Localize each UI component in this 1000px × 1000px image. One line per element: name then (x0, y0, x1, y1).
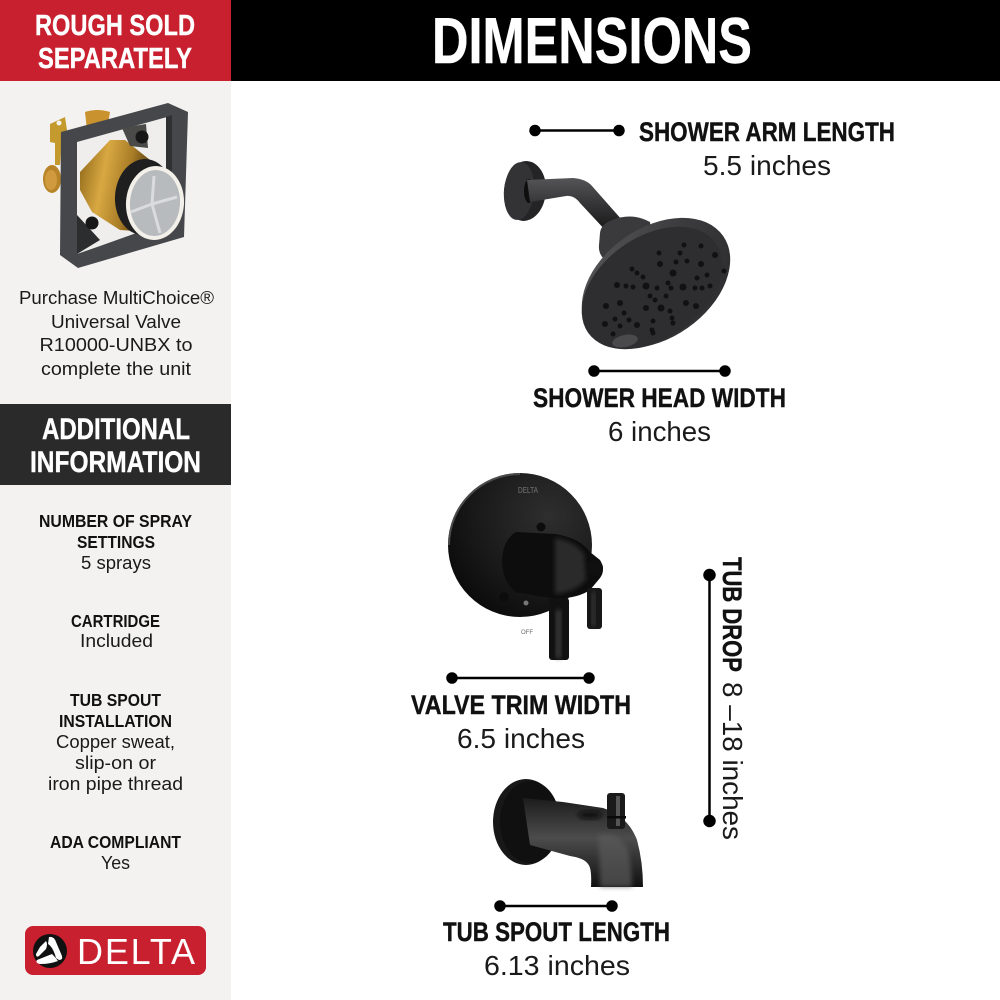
icon: rough-in valve product (43, 103, 188, 268)
label: shower head width (533, 383, 786, 447)
spec: cartridge: Included (80, 631, 153, 651)
spec: cartridge: CARTRIDGE (71, 611, 160, 631)
banner: additional information: INFORMATION (30, 446, 201, 479)
label: valve trim width: 6.5 inches (457, 723, 585, 754)
spec: number of spray settings: SETTINGS (77, 532, 155, 552)
spec: tub spout installation: INSTALLATION (59, 711, 172, 731)
spec: cartridge (71, 611, 160, 651)
spec: tub spout installation: TUB SPOUT (70, 690, 161, 710)
banner: additional information (0, 404, 231, 485)
label: tub spout length: TUB SPOUT LENGTH (443, 917, 670, 947)
label: tub spout length: 6.13 inches (484, 950, 630, 981)
dimension line: tub spout (496, 902, 616, 910)
spec: ada compliant: Yes (101, 853, 130, 873)
label: valve trim width (411, 690, 631, 754)
label: shower arm length: 5.5 inches (703, 150, 831, 181)
spec: ada compliant (50, 832, 181, 873)
spec: number of spray settings (39, 511, 192, 573)
panel: sidebar background (0, 0, 231, 1000)
spec: number of spray settings: 5 sprays (81, 553, 151, 573)
illustration: tub spout (493, 779, 643, 887)
spec: ada compliant: ADA COMPLIANT (50, 832, 181, 852)
logo: delta (25, 926, 206, 975)
spec: tub spout installation: iron pipe thread (48, 774, 183, 794)
text block: valve purchase note: complete the unit (41, 359, 191, 379)
illustration: valve trim: OFF (521, 630, 533, 636)
label: tub drop: TUB DROP (717, 557, 747, 672)
spec: tub spout installation: slip-on or (75, 753, 156, 773)
dimension line: valve trim (448, 674, 594, 682)
illustration: valve trim (448, 473, 603, 660)
spec: number of spray settings: NUMBER OF SPRAY (39, 511, 192, 531)
label: valve trim width: VALVE TRIM WIDTH (411, 690, 631, 720)
illustration: valve trim: DELTA (518, 486, 539, 495)
label: shower arm length: SHOWER ARM LENGTH (639, 117, 895, 147)
label: shower head width: 6 inches (608, 416, 711, 447)
title banner: dimensions: DIMENSIONS (432, 4, 752, 77)
dimension line: shower head (590, 366, 730, 376)
logo: delta: DELTA (77, 931, 195, 972)
text block: valve purchase note: Purchase MultiChoice® (19, 288, 214, 308)
title banner: dimensions (231, 0, 1000, 81)
label: tub spout length (443, 917, 670, 981)
text block: valve purchase note (19, 288, 214, 379)
illustration: shower head (501, 159, 755, 375)
banner: rough sold separately (0, 0, 231, 81)
spec: tub spout installation (48, 690, 183, 794)
label: tub drop: 8 –18 inches (717, 682, 748, 840)
label: shower head width: SHOWER HEAD WIDTH (533, 383, 786, 413)
banner: additional information: ADDITIONAL (42, 413, 190, 446)
banner: rough sold separately: ROUGH SOLD (35, 10, 195, 42)
label: shower arm length (639, 117, 895, 181)
text block: valve purchase note: R10000-UNBX to (40, 335, 192, 355)
text block: valve purchase note: Universal Valve (51, 312, 181, 332)
banner: rough sold separately: SEPARATELY (38, 43, 192, 75)
spec: tub spout installation: Copper sweat, (56, 732, 175, 752)
label: tub drop (717, 557, 748, 840)
dimension line: tub drop (704, 570, 714, 826)
dimension line: shower arm (530, 126, 624, 135)
